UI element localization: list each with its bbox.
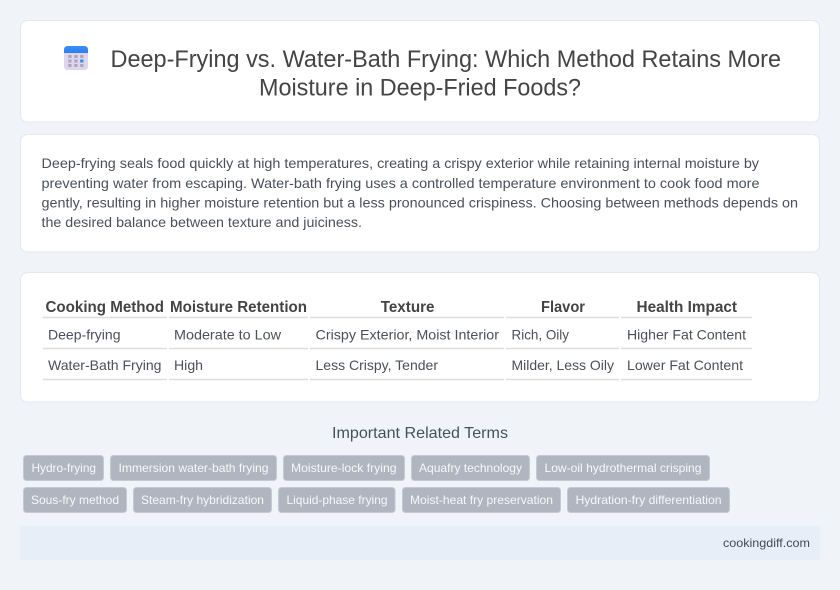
tag row 1: Aquafry technology [419,461,522,475]
table row: deep-frying: Deep-frying [48,326,120,342]
table header row: Cooking Method [46,299,164,316]
table row: deep-frying: Crispy Exterior, Moist Interior [316,326,499,342]
table row: deep-frying [48,326,746,342]
heading: related terms: Important Related Terms [332,425,508,442]
panel: description [20,134,820,252]
tag row 1: Immersion water-bath frying [118,461,268,475]
table row: water-bath frying: Water-Bath Frying [48,357,162,373]
table header row [46,299,738,316]
table row: water-bath frying: Less Crispy, Tender [316,357,438,373]
icon: calendar [64,46,88,70]
tag row 2: Steam-fry hybridization [141,493,264,507]
text block: description [42,155,798,230]
text block: description: Deep-frying seals food quickly at high temperatures, creating a crispy exterior while retaining internal moisture by [42,155,759,171]
title [110,46,781,102]
table row: water-bath frying: Lower Fat Content [627,357,743,373]
table row: deep-frying: Rich, Oily [512,326,569,342]
tag row 2: Moist-heat fry preservation [410,493,553,507]
tag row 1: Moisture-lock frying [291,461,396,475]
table row: water-bath frying [48,357,743,373]
table row: water-bath frying: Milder, Less Oily [512,357,614,373]
tag row 2: Liquid-phase frying [286,493,388,507]
panel: title header [20,20,820,122]
tag row 2: Sous-fry method [31,493,119,507]
footer [20,526,820,560]
tag row 2 [24,488,730,512]
panel: comparison table [20,272,820,402]
footer: cookingdiff.com [723,536,810,550]
text block: description: preventing water from escaping. Water-bath frying uses a controlled temperature environment to cook food more [42,175,760,191]
table row: deep-frying: Moderate to Low [174,326,282,342]
table header row: Health Impact [636,299,738,316]
title: Moisture in Deep-Fried Foods? [259,74,581,102]
tag row 1: Hydro-frying [32,461,96,475]
text block: description: the desired balance between texture and juiciness. [42,214,362,230]
table header row: Moisture Retention [170,299,307,316]
table header row: Flavor [541,299,585,316]
table header row: Texture [381,299,435,316]
tag row 1: Low-oil hydrothermal crisping [544,461,702,475]
text block: description: gently, resulting in higher moisture retention but a less pronounced crispiness. Choosing between methods depends on [42,194,798,210]
title: Deep-Frying vs. Water-Bath Frying: Which Method Retains More [110,46,781,73]
table row: deep-frying: Higher Fat Content [627,326,746,342]
tag row 2: Hydration-fry differentiation [576,493,722,507]
tags: related terms [24,456,730,512]
tag row 1 [24,456,710,480]
table row: water-bath frying: High [174,357,203,373]
